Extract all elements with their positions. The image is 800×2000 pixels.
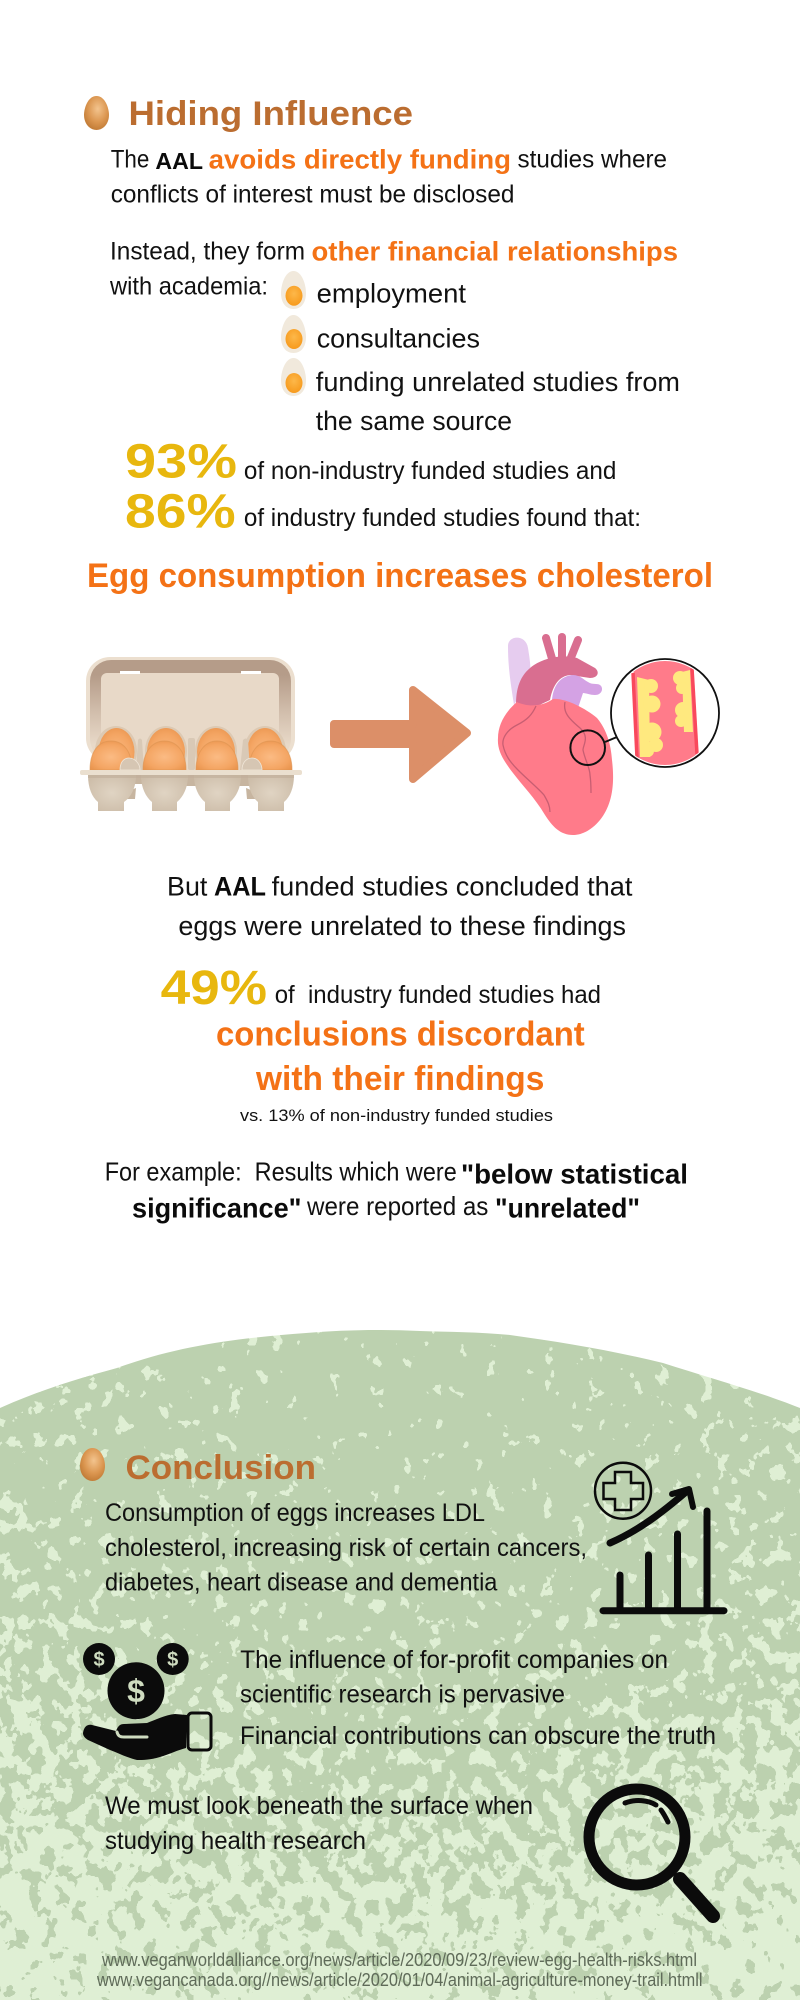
list item: funding unrelated studies: [316, 367, 680, 436]
sources: www.veganworldalliance.org/news/article/2020/09/23/review-egg-health-risks.html: [101, 1950, 697, 1970]
stat: 93 percent: 93%: [125, 435, 237, 488]
panel: AAL funded conclusions: [105, 872, 688, 1223]
background: speckled green hill: [0, 1320, 800, 2000]
illustration: heart with clogged artery: [498, 637, 719, 835]
text block: AAL avoids direct funding: The: [111, 145, 149, 173]
text block: for-profit influence: scientific research is pervasive: [240, 1681, 565, 1709]
icon: hand holding coins: [83, 1643, 211, 1760]
text block: AAL avoids direct funding: avoids directly funding: [209, 145, 511, 175]
text block: AAL funded studies concluded: But: [167, 872, 208, 902]
bullet list: financial relationships: [281, 271, 680, 436]
icon: magnifying glass: [589, 1789, 713, 1916]
list item: funding unrelated studies: the same source: [316, 406, 512, 436]
text block: AAL avoids direct funding: AAL: [155, 148, 203, 174]
back row of cups in shadow: [126, 774, 256, 799]
stat: 49 percent: 49%: [161, 962, 267, 1015]
highlight: conclusions discordant with findings: [216, 1016, 585, 1098]
text block: AAL funded studies concluded: AAL: [214, 872, 266, 902]
text block: AAL avoids direct funding: conflicts of interest must be disclosed: [111, 180, 514, 208]
text block: other financial relationships: other financial relationships: [312, 237, 678, 267]
stat: 86 percent: [125, 485, 641, 538]
list item: employment: employment: [317, 279, 466, 309]
stat: 49 percent: of industry funded studies had: [275, 981, 601, 1009]
text block: example: "unrelated": [495, 1192, 640, 1223]
stat: 49 percent: [161, 962, 601, 1015]
sources: www.vegancanada.org//news/article/2020/01/04/animal-agriculture-money-trail.htmll: [96, 1970, 702, 1990]
icon: egg bullet 3: [281, 358, 306, 396]
text block: example: For example: Results which were: [105, 1157, 457, 1187]
text block: health risks: cholesterol, increasing risk of certain cancers,: [105, 1534, 587, 1562]
text block: other financial relationships: with academia:: [109, 272, 268, 300]
icon: brown egg: [84, 96, 109, 130]
back row eggs: [95, 726, 286, 776]
illustration: egg carton: [80, 657, 302, 811]
icon: egg bullet 2: [281, 315, 306, 353]
stat: 93 percent: [125, 435, 616, 488]
text block: look beneath the surface: studying health research: [105, 1827, 366, 1855]
text block: other financial relationships: [109, 237, 678, 300]
list item: funding unrelated studies: funding unrelated studies from: [316, 367, 680, 397]
stat: 86 percent: 86%: [125, 485, 236, 538]
magnifier ring: [570, 730, 605, 765]
icon: egg bullet 1: [281, 271, 306, 309]
text block: for-profit influence: The influence of for-profit companies on: [240, 1646, 668, 1674]
text block: for-profit influence: [240, 1646, 716, 1750]
icon: hand holding coins: $: [127, 1673, 145, 1709]
text block: AAL funded studies concluded: funded studies concluded that: [272, 872, 633, 902]
text block: example: "below statistical: [461, 1158, 688, 1189]
highlight: conclusions discordant with findings: with their findings: [255, 1060, 544, 1098]
text block: for-profit influence: Financial contributions can obscure the truth: [240, 1722, 716, 1750]
text block: example: significance": [132, 1192, 302, 1223]
icon: brown egg: [80, 1448, 105, 1481]
heart body: [498, 699, 613, 835]
heading: egg consumption increases cholesterol: Egg consumption increases cholesterol: [87, 557, 713, 595]
text block: health risks: diabetes, heart disease and dementia: [105, 1569, 497, 1597]
text block: health risks: Consumption of eggs increases LDL: [105, 1499, 485, 1527]
arrow: eggs lead to heart disease: [334, 690, 467, 779]
icon: rising health chart: [595, 1463, 724, 1611]
artery close-up: [611, 659, 719, 767]
heading: Conclusion: Conclusion: [126, 1449, 316, 1487]
icon: hand holding coins: $: [167, 1649, 178, 1671]
sources: [96, 1950, 702, 1990]
panel: hiding influence: [84, 95, 713, 595]
list item: consultancies: consultancies: [317, 323, 480, 353]
text block: look beneath the surface: We must look beneath the surface when: [105, 1792, 533, 1820]
icon: hand holding coins: $: [93, 1649, 105, 1671]
stat: 86 percent: of industry funded studies found that:: [244, 504, 641, 532]
panel: conclusion: [80, 1448, 724, 1990]
text block: AAL funded studies concluded: eggs were unrelated to these findings: [178, 911, 626, 941]
highlight: conclusions discordant with findings: conclusions discordant: [216, 1016, 585, 1054]
text block: other financial relationships: Instead, they form: [110, 237, 305, 265]
text block: AAL funded studies concluded: [167, 872, 633, 941]
text block: example: were reported as: [306, 1191, 488, 1221]
text block: look beneath the surface: [105, 1792, 533, 1855]
text block: AAL avoids direct funding: [111, 145, 667, 208]
heart vessels: [508, 637, 602, 708]
text block: AAL avoids direct funding: studies where: [518, 145, 667, 173]
front row eggs: [90, 741, 292, 770]
note: non-industry comparison: vs. 13% of non-industry funded studies: [240, 1106, 553, 1125]
stat: 93 percent: of non-industry funded studies and: [244, 457, 616, 485]
heading: Hiding Influence: Hiding Influence: [128, 95, 413, 133]
text block: example: [105, 1157, 688, 1223]
text block: health risks: [105, 1499, 587, 1597]
